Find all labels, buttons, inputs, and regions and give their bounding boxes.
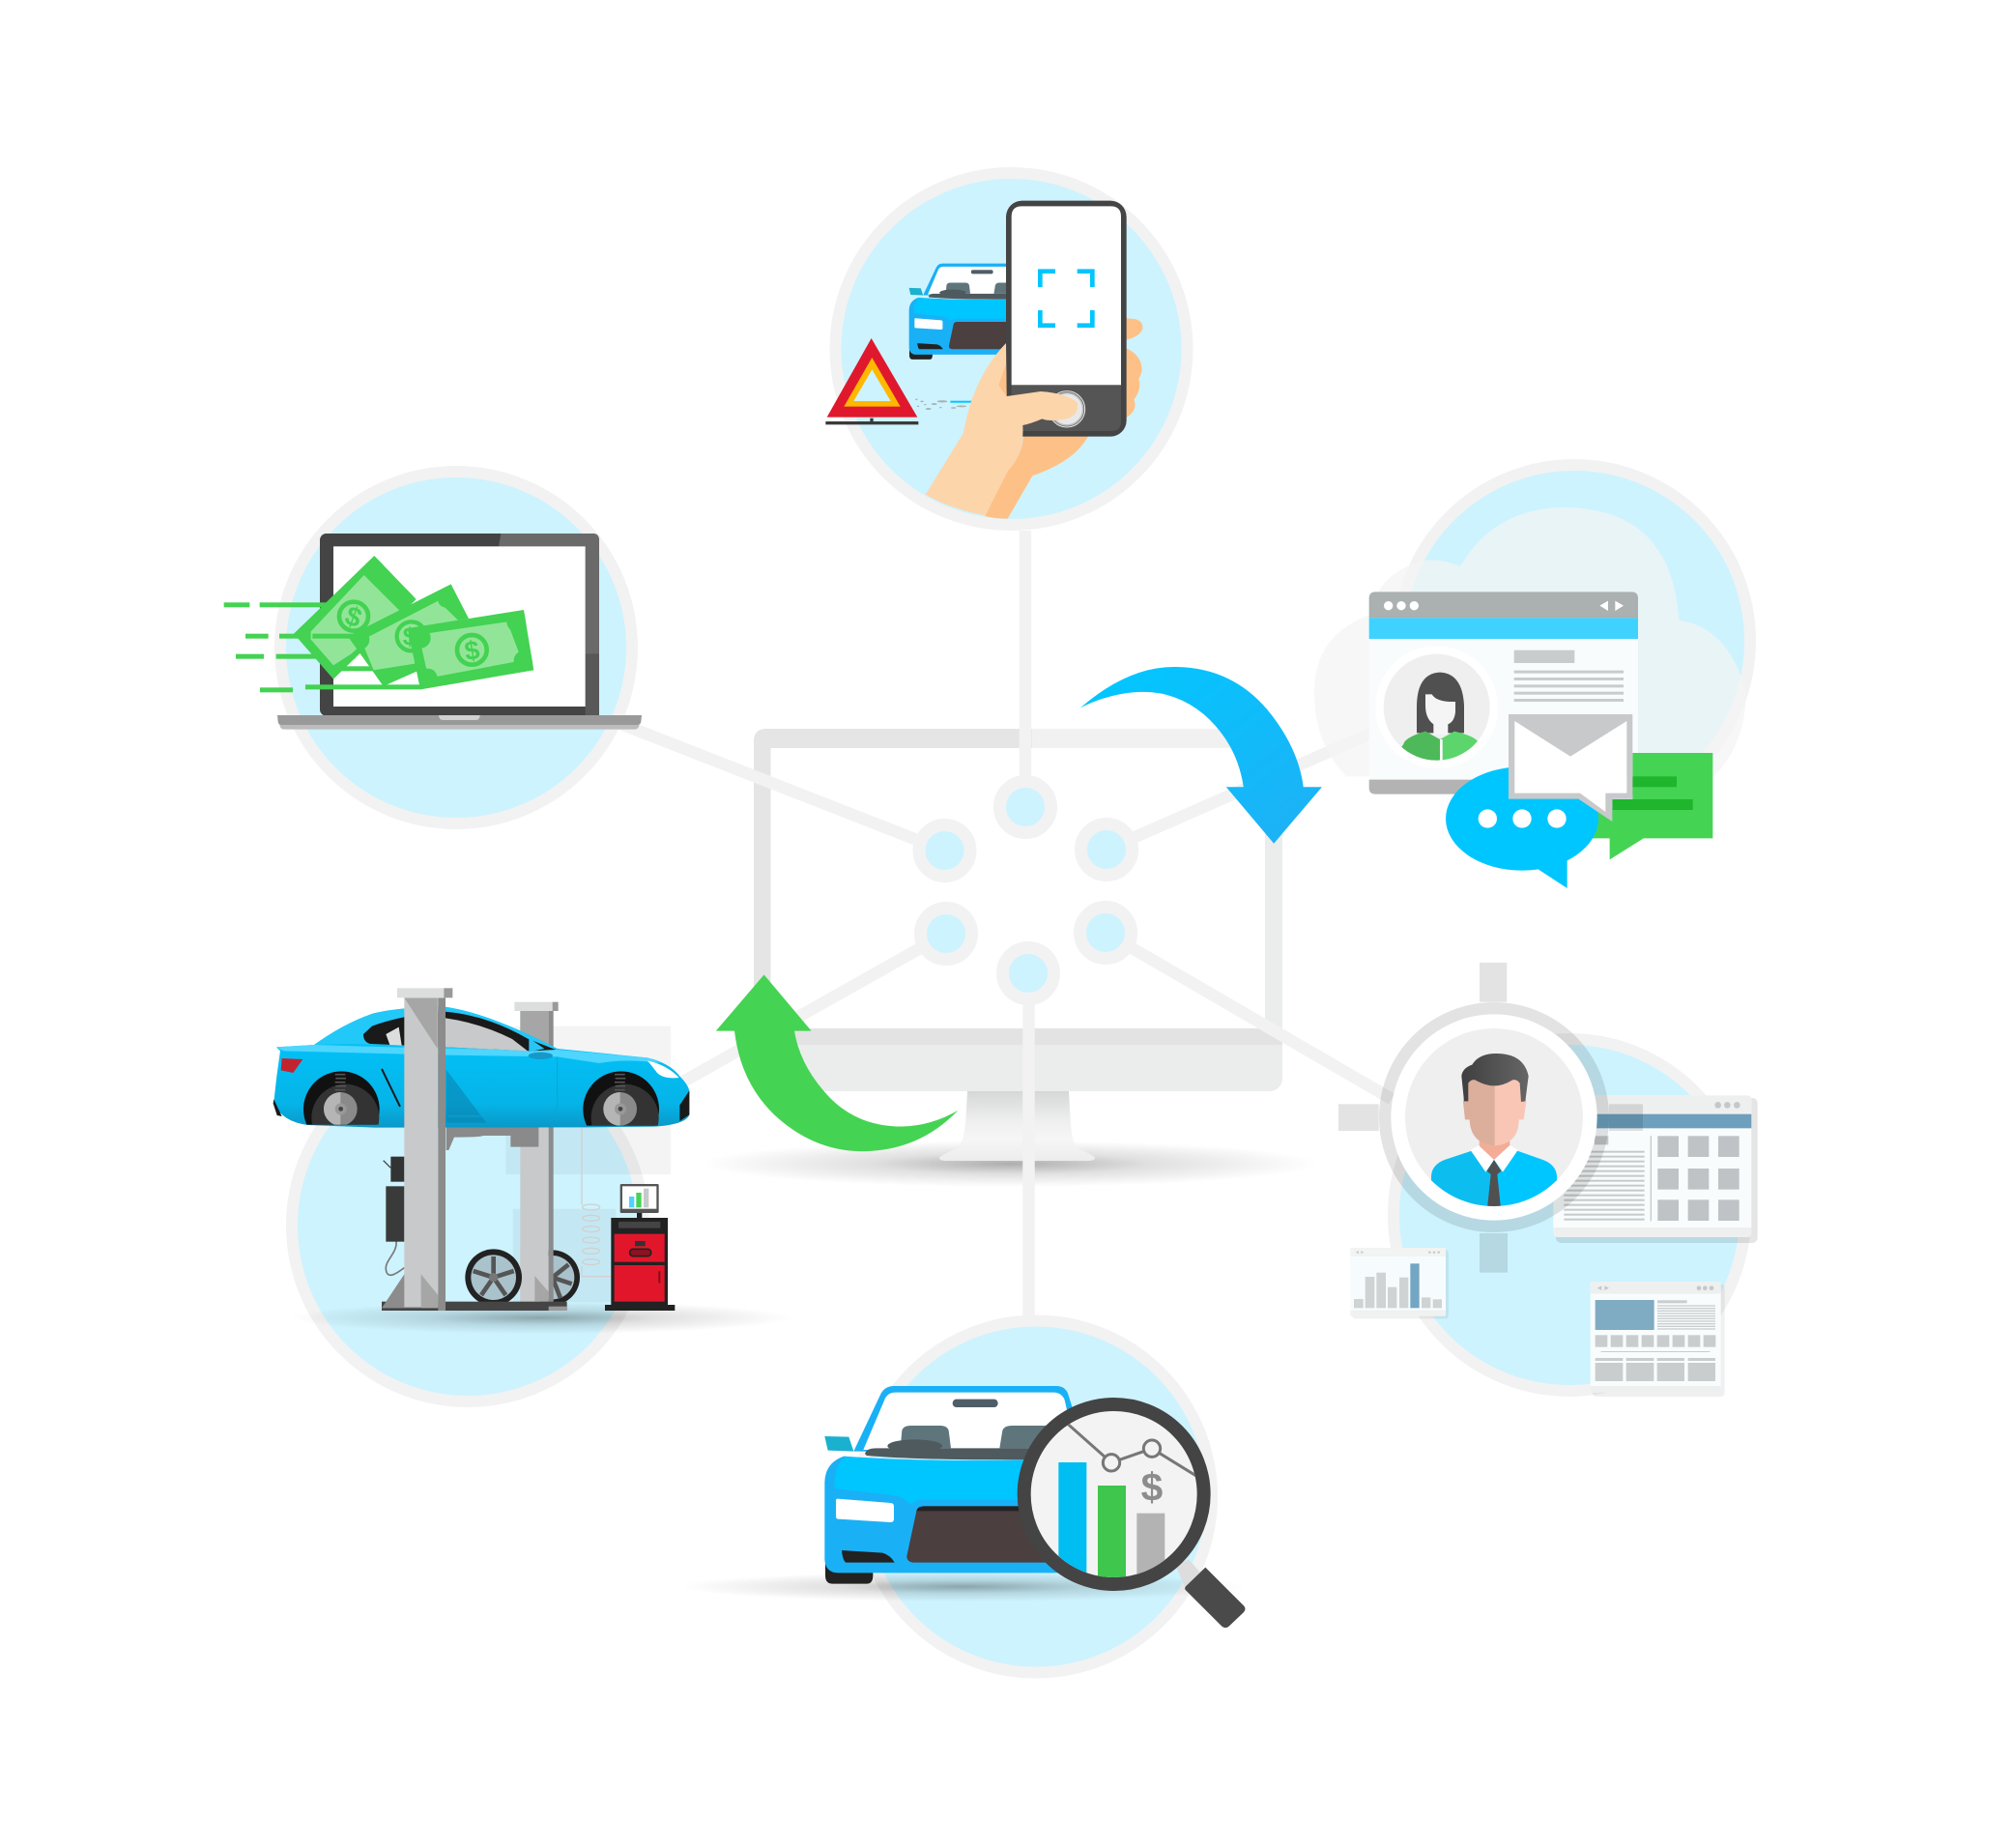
panel: bottom circle (860, 1320, 1212, 1672)
arrow: green (716, 974, 958, 1151)
icon: green chat bubble (1588, 753, 1712, 859)
icon: front car small (909, 264, 1036, 360)
central monitor (701, 729, 1319, 1187)
icon: front car large (824, 1386, 1085, 1584)
icon: smartphone (1006, 201, 1127, 437)
icon: hand front (926, 343, 1078, 515)
icon: spare wheel (465, 1249, 522, 1306)
icon: blue chat bubble (1446, 766, 1598, 888)
scene: car with analytics magnifier (679, 1386, 1247, 1628)
floor shadow (679, 1572, 1247, 1602)
icon: front wheel arch (583, 1071, 659, 1126)
icon: coiled cable (582, 1128, 612, 1277)
scene: car on service lift (273, 988, 792, 1334)
icon: main lift column (382, 988, 567, 1311)
scene: customer communication (1368, 507, 1740, 888)
arrows (716, 667, 1322, 1151)
chart inside lens: $ (1141, 1465, 1164, 1510)
connector lines (618, 531, 1392, 1320)
icon: diagnostic cabinet (605, 1184, 675, 1311)
icon: banknote 2: $ (403, 621, 417, 650)
icon: browser window (1369, 592, 1638, 794)
icon: cloud (1314, 507, 1746, 776)
icon: magnifying glass (1024, 1404, 1246, 1628)
icon: rear wheel arch (303, 1071, 380, 1125)
panel: lower left circle (292, 1050, 644, 1401)
icon: speed lines (224, 602, 421, 692)
icon: dashboard window large (1553, 1095, 1758, 1243)
icon: second lift column (514, 1002, 559, 1306)
icon: banknote 2 (348, 584, 469, 686)
icon: laptop (277, 534, 642, 730)
icon: report window (1591, 1282, 1725, 1397)
floor shadow (290, 1302, 792, 1334)
panel: lower right circle (1394, 1039, 1745, 1391)
scene: service advisor with dashboards (1338, 963, 1758, 1397)
icon: woman avatar (1384, 653, 1490, 761)
icon: warning triangle (825, 338, 918, 424)
icon: banknote 1: $ (341, 600, 366, 634)
scene: laptop with flying money (224, 534, 642, 730)
icon: lift arm (446, 1126, 538, 1150)
panel: left circle (280, 472, 632, 823)
infographic (224, 167, 1757, 1678)
icon: chart window (1350, 1248, 1449, 1318)
icon: control unit with cable (384, 1157, 404, 1275)
icon: envelope (1509, 714, 1632, 822)
hub nodes (919, 781, 1133, 999)
icon: hand back (985, 318, 1142, 519)
icon: advisor crosshair ring (1338, 963, 1643, 1273)
faint background panels (505, 1026, 671, 1302)
panel: top circle (835, 173, 1187, 525)
icon: banknote 3 (408, 610, 533, 689)
scene: phone photographing damaged car (825, 201, 1142, 519)
icon: skid marks (915, 399, 971, 410)
panel: right circle (1398, 465, 1750, 817)
icon: banknote 3: $ (462, 634, 481, 666)
arrow: blue (1080, 667, 1322, 844)
icon: rear spare wheel (520, 1250, 580, 1305)
chart inside lens (1058, 1424, 1194, 1577)
icon: advisor portrait (1431, 1054, 1557, 1211)
icon: car side view (273, 1007, 690, 1128)
icon: banknote 1 (294, 556, 417, 679)
